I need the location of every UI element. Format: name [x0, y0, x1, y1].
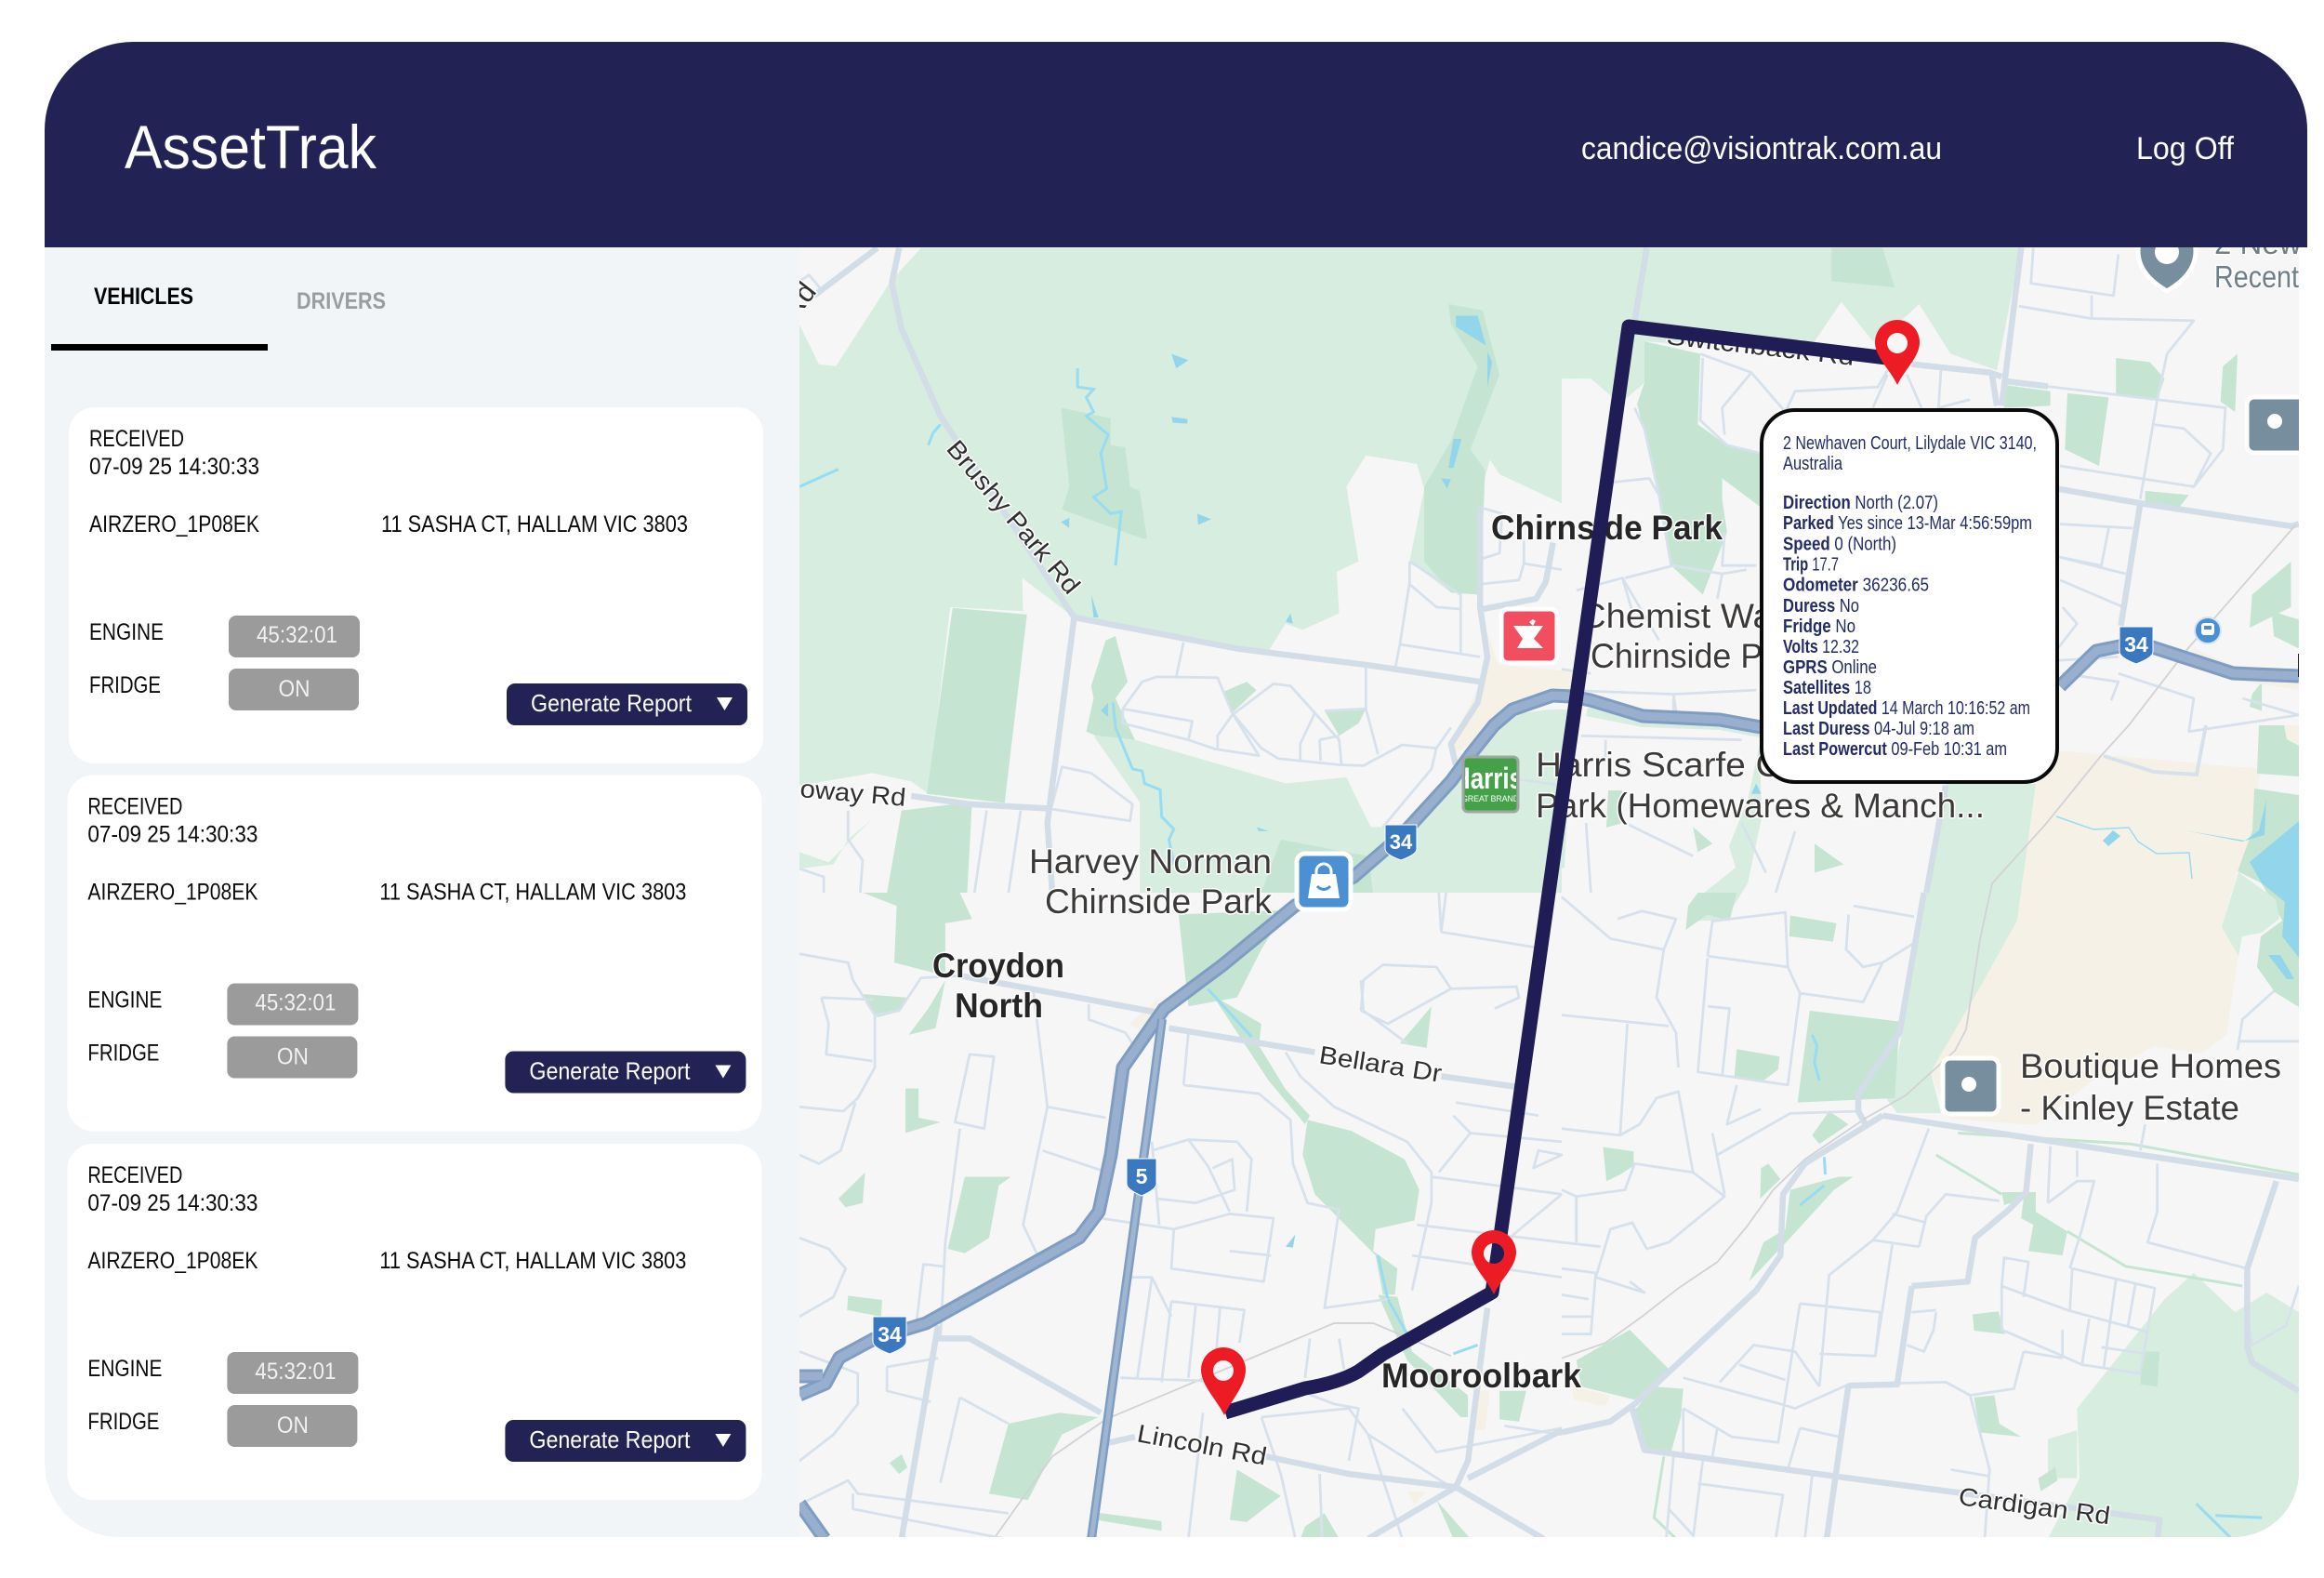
map land: estate, lake and shopping precinct — [1441, 632, 2299, 1125]
generate report button: Generate Report — [529, 1056, 691, 1084]
panel: map — [774, 222, 2312, 1540]
map land areas and roads, north-west — [799, 248, 1562, 893]
callout status list: Volts 12.32 — [1783, 637, 1859, 657]
label: place names — [932, 226, 2302, 1395]
icon: harvey norman bag — [1297, 854, 1351, 909]
fridge status pill — [227, 1405, 357, 1447]
icon: boutique homes marker — [1943, 1058, 1999, 1114]
engine status pill — [229, 616, 360, 657]
callout address — [1783, 433, 2037, 474]
label: place names: Chirnside Park — [1491, 509, 1723, 547]
callout status list: Satellites 18 — [1783, 678, 1871, 698]
title: AssetTrak — [125, 113, 377, 181]
callout address: 2 Newhaven Court, Lilydale VIC 3140, — [1783, 433, 2037, 454]
callout status list: Trip 17.7 — [1783, 554, 1839, 575]
panel: vehicle card 1: RECEIVED — [89, 426, 184, 452]
panel: vehicle card 3: ENGINE — [87, 1356, 162, 1382]
tab: drivers: DRIVERS — [297, 288, 386, 314]
callout status list: Last Duress 04-Jul 9:18 am — [1783, 719, 1974, 739]
label: place names: Croydon — [932, 947, 1064, 985]
engine status pill: 45:32:01 — [255, 989, 336, 1015]
panel: vehicle card 3 — [67, 1144, 761, 1500]
label: road names: Lincoln Rd — [1135, 1419, 1269, 1471]
fridge status pill — [227, 1036, 357, 1079]
label: place names: North — [955, 987, 1043, 1025]
engine status pill — [227, 1352, 358, 1394]
panel: vehicle card 1: FRIDGE — [89, 672, 161, 698]
callout: vehicle details — [1762, 410, 2057, 782]
user email: candice@visiontrak.com.au — [1581, 131, 1942, 166]
panel: vehicle card 3: 11 SASHA CT, HALLAM VIC 3803 — [379, 1248, 686, 1274]
label: place names: Mooroolbark — [1381, 1357, 1581, 1395]
label: place names: Harvey Norman — [1029, 842, 1272, 881]
shield: route 5: 5 — [1136, 1164, 1148, 1188]
icon: edge marker — [2247, 397, 2312, 453]
callout status list: Last Powercut 09-Feb 10:31 am — [1783, 739, 2007, 760]
panel: vehicle card 2: ENGINE — [87, 988, 162, 1014]
fridge status pill — [229, 669, 359, 710]
panel: vehicle card 3: RECEIVED — [87, 1162, 182, 1188]
callout status list: Direction North (2.07) — [1783, 493, 1938, 513]
label: place names: Park (Homewares & Manch... — [1536, 787, 1985, 825]
callout address: Australia — [1783, 454, 1843, 474]
log off link: Log Off — [2136, 131, 2235, 166]
map land areas and roads, south-west — [799, 893, 1562, 1540]
label: road names — [774, 276, 2112, 1530]
label: place names: Chirnside Park — [1591, 637, 1809, 675]
panel: vehicle card 1 — [69, 407, 763, 763]
panel: vehicle card 3: 07-09 25 14:30:33 — [87, 1190, 257, 1216]
panel: vehicle card 2: RECEIVED — [87, 794, 182, 820]
map pin: start — [1201, 1347, 1246, 1415]
panel: vehicle card 3: FRIDGE — [87, 1409, 159, 1435]
callout status list: Speed 0 (North) — [1783, 534, 1896, 554]
map land areas and roads, north-east — [1562, 248, 2299, 893]
label: place names: Boutique Homes — [2020, 1047, 2281, 1085]
panel: vehicle card 3: AIRZERO_1P08EK — [87, 1248, 258, 1274]
tab: vehicles — [51, 284, 268, 351]
map land areas and roads, south-east — [1562, 893, 2299, 1539]
panel: vehicle card 2 — [67, 776, 761, 1131]
engine status pill — [227, 984, 358, 1025]
label: road names: Brushy Park Rd — [941, 435, 1086, 600]
label: place names: Chirnside Park — [1045, 882, 1272, 921]
icon: harris scarfe: GREAT BRANDS — [1461, 794, 1525, 803]
highway 5 — [1091, 1019, 1162, 1539]
generate report button — [505, 1051, 746, 1094]
engine status pill: 45:32:01 — [257, 622, 337, 648]
map railway and estate access road — [1863, 524, 2296, 1120]
panel: vehicle card 1: AIRZERO_1P08EK — [89, 511, 259, 537]
label: place names: Harris Scarfe Chirnside — [1536, 746, 1908, 784]
panel: header bar — [45, 42, 2307, 247]
callout status list: Fridge No — [1783, 617, 1855, 637]
label: place names: 2 New — [2214, 226, 2302, 260]
callout status list: Last Updated 14 March 10:16:52 am — [1783, 698, 2030, 719]
panel: vehicle card 2: AIRZERO_1P08EK — [87, 880, 258, 906]
label: road names: Cardigan Rd — [1957, 1482, 2112, 1530]
label: place names: Chemist Warehouse — [1580, 597, 1901, 635]
engine status pill: 45:32:01 — [255, 1359, 336, 1385]
shield: route 34 north: 34 — [1390, 830, 1413, 854]
map pin: middle — [1472, 1230, 1516, 1294]
label: road names: Switchback Rd — [1665, 322, 1855, 371]
callout status list — [1783, 493, 2032, 760]
generate report button — [505, 1420, 746, 1462]
shield: route 34 north — [1385, 825, 1417, 860]
fridge status pill: ON — [279, 676, 310, 702]
callout status list: Parked Yes since 13-Mar 4:56:59pm — [1783, 513, 2032, 534]
panel: vehicle card 2: 07-09 25 14:30:33 — [87, 822, 257, 848]
shield: route 5 — [1127, 1159, 1156, 1196]
label: place names: Recent — [2214, 259, 2299, 294]
label: road names: Bellara Dr — [1317, 1041, 1444, 1088]
icon: train station — [2195, 617, 2221, 643]
generate report button: Generate Report — [531, 689, 693, 717]
label: road names: oway Rd — [799, 775, 907, 812]
shield: route 34 east: 34 — [2124, 632, 2148, 656]
callout status list: Duress No — [1783, 596, 1859, 617]
panel: vehicle card 1: 07-09 25 14:30:33 — [89, 454, 259, 480]
route line — [1225, 326, 1887, 1412]
icon: chemist — [1501, 609, 1557, 663]
highway 34 — [799, 643, 2299, 1539]
icon: harris scarfe — [1461, 755, 1519, 813]
shield: route 34 south-west — [873, 1317, 906, 1354]
callout status list: Odometer 36236.65 — [1783, 575, 1929, 595]
map pin: end — [1875, 320, 1920, 385]
label: road names: Rd — [774, 276, 823, 325]
fridge status pill: ON — [277, 1412, 309, 1439]
label: place names: - Kinley Estate — [2020, 1089, 2239, 1127]
panel: left sidebar background — [45, 247, 818, 1537]
icon: recent location marker — [2136, 247, 2198, 294]
shield: route 34 east — [2119, 627, 2153, 664]
fridge status pill: ON — [277, 1043, 309, 1069]
generate report button: Generate Report — [529, 1426, 691, 1453]
callout status list: GPRS Online — [1783, 657, 1877, 678]
generate report button — [507, 683, 747, 725]
panel: vehicle card 1: 11 SASHA CT, HALLAM VIC 3803 — [381, 511, 688, 537]
panel: vehicle card 2: FRIDGE — [87, 1040, 159, 1066]
tab: vehicles: VEHICLES — [94, 284, 193, 310]
panel: vehicle card 1: ENGINE — [89, 619, 164, 645]
panel: vehicle card 2: 11 SASHA CT, HALLAM VIC 3803 — [379, 880, 686, 906]
shield: route 34 south-west: 34 — [878, 1322, 902, 1346]
